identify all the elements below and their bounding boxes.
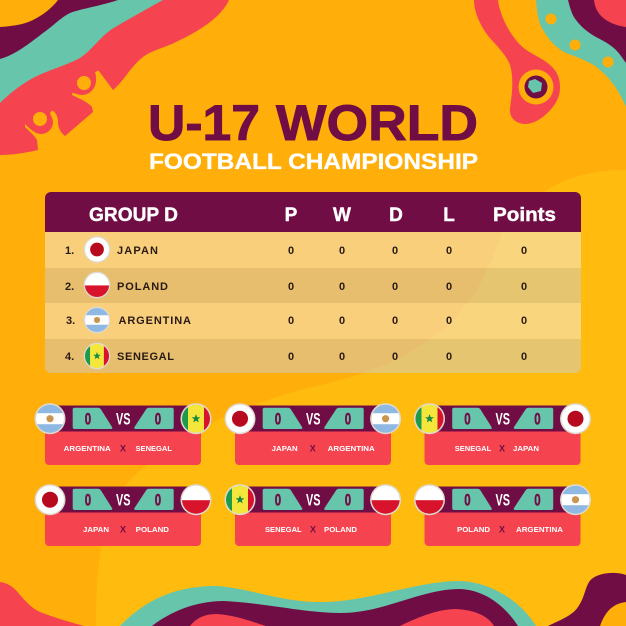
panel: group table	[45, 192, 581, 373]
row: Senegal: 0	[288, 351, 294, 363]
bottom decorative waves	[0, 573, 626, 626]
row: Poland: 0	[446, 281, 452, 293]
row: Argentina: ARGENTINA	[118, 315, 191, 327]
icon: cheering figure upper	[72, 70, 120, 112]
top-right decorative waves	[474, 0, 626, 124]
row: Senegal: SENEGAL	[117, 351, 174, 363]
row: Senegal: 4.	[65, 351, 74, 363]
match card: Japan vs Poland: 0	[155, 490, 161, 510]
match card: Poland vs Argentina: ARGENTINA	[516, 525, 564, 534]
row: Japan: 0	[446, 245, 452, 257]
row: Argentina: 0	[521, 315, 527, 327]
match card: Senegal vs Poland: VS	[306, 490, 320, 510]
row: Senegal: 0	[521, 351, 527, 363]
match card: Argentina vs Senegal: 0	[155, 410, 161, 428]
match card: Senegal vs Poland: POLAND	[324, 525, 358, 534]
row: Argentina: 0	[288, 315, 294, 327]
match card: Senegal vs Japan: 0	[464, 410, 471, 428]
match card: Japan vs Argentina: JAPAN	[272, 444, 298, 453]
row: Japan: 0	[392, 245, 398, 257]
table header: L	[443, 205, 455, 226]
title	[148, 94, 478, 151]
row: Argentina: 0	[392, 315, 398, 327]
match card: Japan vs Argentina	[224, 403, 401, 465]
match card: Japan vs Poland: POLAND	[136, 525, 170, 534]
row: Japan: 0	[339, 245, 345, 257]
table header: Points	[493, 205, 556, 226]
match card: Senegal vs Poland: SENEGAL	[265, 525, 302, 534]
match card: Senegal vs Poland	[224, 484, 401, 546]
match card: Japan vs Argentina: X	[310, 444, 316, 454]
row: Japan	[65, 236, 527, 263]
match card: Argentina vs Senegal: VS	[116, 410, 130, 428]
table header: W	[333, 205, 351, 226]
row: Senegal: 0	[339, 351, 345, 363]
row: Senegal: 0	[392, 351, 398, 363]
match card: Argentina vs Senegal: SENEGAL	[136, 444, 172, 453]
row: Poland: 0	[288, 281, 294, 293]
match card: Poland vs Argentina: 0	[464, 490, 471, 510]
match card: Senegal vs Poland: 0	[275, 490, 281, 510]
table header: P	[285, 205, 298, 226]
table header: GROUP D	[89, 205, 178, 226]
row: Poland: 2.	[65, 281, 74, 293]
match card: Poland vs Argentina: 0	[534, 490, 541, 510]
match card: Poland vs Argentina: POLAND	[457, 525, 491, 534]
match card: Japan vs Poland: X	[120, 524, 126, 534]
match card: Senegal vs Japan	[414, 403, 591, 465]
row: Poland: 0	[392, 281, 398, 293]
match card: Senegal vs Japan: X	[499, 444, 505, 454]
row: Poland	[65, 272, 527, 298]
match card: Argentina vs Senegal: ARGENTINA	[64, 444, 111, 453]
row: Japan: 0	[521, 245, 527, 257]
match card: Senegal vs Japan: VS	[496, 410, 510, 428]
match card: Argentina vs Senegal: X	[120, 444, 126, 454]
row: Argentina: 0	[339, 315, 345, 327]
match card: Japan vs Argentina: ARGENTINA	[328, 444, 375, 453]
match card: Senegal vs Poland: X	[310, 524, 316, 534]
match card: Japan vs Argentina: 0	[345, 410, 351, 428]
row: Japan: 1.	[65, 245, 74, 257]
match card: Argentina vs Senegal	[34, 403, 212, 465]
match card: Poland vs Argentina	[414, 484, 591, 546]
match card: Japan vs Poland	[34, 484, 212, 546]
icon: cheering figure lower	[25, 110, 65, 155]
match card: Japan vs Poland: VS	[116, 490, 130, 510]
title: U-17	[148, 94, 260, 151]
match card: Japan vs Argentina: 0	[275, 410, 281, 428]
match card: Senegal vs Poland: 0	[345, 490, 351, 510]
row: Argentina: 0	[446, 315, 452, 327]
match card: Senegal vs Japan: 0	[534, 410, 541, 428]
row: Poland: 0	[339, 281, 345, 293]
icon: ball ring	[518, 70, 554, 104]
match card: Poland vs Argentina: X	[499, 524, 505, 534]
row: Senegal	[65, 343, 527, 369]
match card: Japan vs Poland: JAPAN	[83, 525, 109, 534]
top-left decorative waves	[0, 0, 229, 155]
table body rows	[45, 232, 581, 373]
match card: Poland vs Argentina: VS	[496, 490, 510, 510]
match card: Japan vs Poland: 0	[85, 490, 91, 510]
table header: D	[389, 205, 403, 226]
match card: Senegal vs Japan: JAPAN	[513, 444, 539, 453]
title: WORLD	[276, 94, 478, 151]
row: Poland: 0	[521, 281, 527, 293]
row: Poland: POLAND	[117, 281, 168, 293]
match card: Argentina vs Senegal: 0	[85, 410, 91, 428]
match card: Senegal vs Japan: SENEGAL	[455, 444, 492, 453]
match card: Japan vs Argentina: VS	[306, 410, 320, 428]
row: Japan: 0	[288, 245, 294, 257]
background lighter wave	[96, 170, 626, 626]
table header	[45, 192, 581, 232]
row: Argentina: 3.	[66, 315, 75, 327]
subtitle: FOOTBALL CHAMPIONSHIP	[149, 149, 478, 174]
row: Senegal: 0	[446, 351, 452, 363]
row: Argentina	[66, 307, 527, 333]
row: Japan: JAPAN	[117, 245, 158, 257]
